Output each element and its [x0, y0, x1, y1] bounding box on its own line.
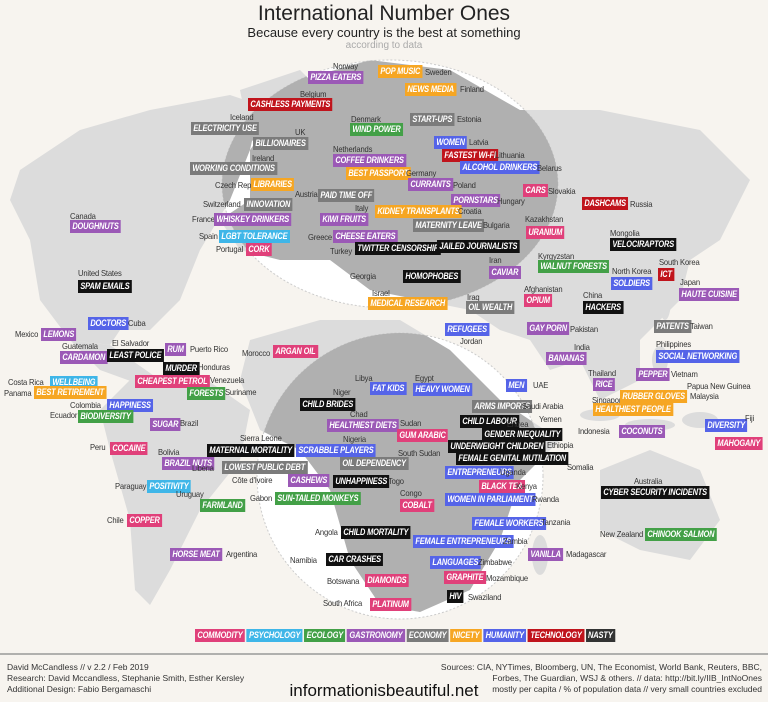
label: CARDAMON: [62, 352, 105, 363]
label: KIWI FRUITS: [322, 214, 366, 225]
label: ALCOHOL DRINKERS: [462, 162, 537, 173]
c: Pakistan: [570, 324, 598, 334]
label: ELECTRICITY USE: [193, 123, 257, 134]
label: DOCTORS: [90, 318, 126, 329]
subtitle: Because every country is the best at something: [247, 25, 521, 40]
label: [506, 379, 527, 392]
legend: ECOLOGY: [307, 630, 343, 641]
c: Georgia: [350, 271, 376, 281]
label: ICT: [660, 269, 672, 280]
c: Madagascar: [566, 549, 606, 559]
c: Mexico: [15, 329, 38, 339]
label: RICE: [595, 379, 612, 390]
label: KIDNEY TRANSPLANTS: [377, 206, 460, 217]
c: Philippines: [656, 339, 691, 349]
c: Bolivia: [158, 447, 179, 457]
label: COCONUTS: [621, 426, 662, 437]
label: UNDERWEIGHT CHILDREN: [450, 441, 543, 452]
credits: Additional Design: Fabio Bergamaschi: [7, 684, 151, 694]
legend: NICETY: [453, 630, 479, 641]
c: Australia: [634, 476, 662, 486]
label: FASTEST WI-FI: [444, 150, 496, 161]
label: CAVIAR: [491, 267, 518, 278]
c: Puerto Rico: [190, 344, 228, 354]
label: COBALT: [402, 500, 432, 511]
c: North Korea: [612, 266, 651, 276]
label: LEMONS: [43, 329, 74, 340]
c: Fiji: [745, 413, 754, 423]
website: informationisbeautiful.net: [289, 681, 478, 700]
label: CHILD LABOUR: [462, 416, 517, 427]
c: Togo: [388, 476, 404, 486]
c: Somalia: [567, 462, 593, 472]
label: MAHOGANY: [717, 438, 760, 449]
label: DASHCAMS: [584, 198, 626, 209]
c: Iceland: [230, 112, 253, 122]
label: [165, 343, 186, 356]
label: CHINOOK SALMON: [647, 529, 714, 540]
c: Côte d'Ivoire: [232, 475, 272, 485]
c: New Zealand: [600, 529, 643, 539]
c: Vietnam: [671, 369, 698, 379]
label: REFUGEES: [447, 324, 487, 335]
c: Swaziland: [468, 592, 501, 602]
label: LIBRARIES: [253, 179, 292, 190]
label: RUM: [167, 344, 184, 355]
c: Zambia: [503, 536, 527, 546]
c: Estonia: [457, 114, 481, 124]
c: Sudan: [400, 418, 421, 428]
label: CORK: [248, 244, 270, 255]
credits: [7, 662, 244, 694]
label: BANANAS: [548, 353, 584, 364]
label: WHISKEY DRINKERS: [216, 214, 289, 225]
credits: Research: David Mccandless, Stephanie Smith, Esther Kersley: [7, 673, 244, 683]
c: Saudi Arabia: [522, 401, 563, 411]
label: HAPPINESS: [109, 400, 151, 411]
label: INNOVATION: [246, 199, 290, 210]
c: Slovakia: [548, 186, 575, 196]
label: LOWEST PUBLIC DEBT: [224, 462, 305, 473]
c: Kenya: [516, 481, 537, 491]
c: South Africa: [323, 598, 362, 608]
label: WELLBEING: [52, 377, 95, 388]
label: HOMOPHOBES: [405, 271, 458, 282]
c: El Salvador: [112, 338, 149, 348]
label: FAT KIDS: [372, 383, 404, 394]
sources: Forbes, The Guardian, WSJ & others. // data: http://bit.ly/IIB_IntNoOnes: [492, 673, 762, 683]
c: Colombia: [70, 400, 101, 410]
c: United States: [78, 268, 122, 278]
legend: [195, 629, 616, 642]
label: DOUGHNUTS: [72, 221, 119, 232]
c: Congo: [400, 488, 422, 498]
c: Iraq: [467, 292, 479, 302]
c: Brazil: [180, 418, 198, 428]
c: Israel: [372, 288, 390, 298]
c: Switzerland: [203, 199, 241, 209]
c: Norway: [333, 61, 358, 71]
label: BEST RETIREMENT: [36, 387, 104, 398]
label: WOMEN IN PARLIAMENT: [447, 494, 533, 505]
c: Papua New Guinea: [687, 381, 750, 391]
c: Sierra Leone: [240, 433, 282, 443]
label: JAILED JOURNALISTS: [439, 241, 517, 252]
label: SUN-TAILED MONKEYS: [277, 493, 358, 504]
c: Jordan: [460, 336, 482, 346]
label: HACKERS: [585, 302, 621, 313]
legend: HUMANITY: [486, 630, 524, 641]
label: ENTREPRENEURS: [447, 467, 512, 478]
label: BRAZIL NUTS: [164, 458, 212, 469]
label: LGBT TOLERANCE: [221, 231, 287, 242]
label: OIL WEALTH: [468, 302, 512, 313]
label: VANILLA: [530, 549, 561, 560]
label: BIODIVERSITY: [80, 411, 131, 422]
label: [593, 378, 615, 391]
label: ARGAN OIL: [275, 346, 316, 357]
c: Costa Rica: [8, 377, 44, 387]
label: HAUTE CUISINE: [681, 289, 737, 300]
label: WIND POWER: [352, 124, 401, 135]
label: OIL DEPENDENCY: [342, 458, 406, 469]
c: China: [583, 290, 602, 300]
c: Greece: [308, 232, 332, 242]
legend: PSYCHOLOGY: [249, 630, 300, 641]
c: Russia: [630, 199, 652, 209]
label: MEN: [508, 380, 524, 391]
label: PORNSTARS: [453, 195, 498, 206]
label: ARMS IMPORTS: [474, 401, 530, 412]
c: South Korea: [659, 257, 700, 267]
label: HEALTHIEST DIETS: [329, 420, 397, 431]
label: LEAST POLICE: [109, 350, 161, 361]
c: Turkey: [330, 246, 352, 256]
label: SUGAR: [152, 419, 178, 430]
label: PIZZA EATERS: [310, 72, 361, 83]
c: UAE: [533, 380, 548, 390]
sources: [441, 662, 762, 694]
c: Paraguay: [115, 481, 146, 491]
c: Poland: [453, 180, 476, 190]
label: OPIUM: [526, 295, 550, 306]
label: CAR CRASHES: [328, 554, 381, 565]
label: START-UPS: [412, 114, 452, 125]
c: Cuba: [128, 318, 146, 328]
label: [246, 243, 272, 256]
label: WALNUT FORESTS: [540, 261, 607, 272]
legend: TECHNOLOGY: [530, 630, 582, 641]
label: [447, 590, 464, 603]
c: Namibia: [290, 555, 317, 565]
c: Argentina: [226, 549, 257, 559]
label: GRAPHITE: [446, 572, 483, 583]
c: Singapore: [592, 395, 625, 405]
label: CHILD MORTALITY: [343, 527, 408, 538]
label: CHILD BRIDES: [302, 399, 353, 410]
c: Eritrea: [507, 419, 528, 429]
c: Afghanistan: [524, 284, 562, 294]
c: Uruguay: [176, 489, 204, 499]
label: LANGUAGES: [432, 557, 478, 568]
c: Hungary: [497, 196, 525, 206]
label: HEALTHIEST PEOPLE: [595, 404, 671, 415]
label: CHEAPEST PETROL: [137, 376, 207, 387]
c: France: [192, 214, 215, 224]
label: GENDER INEQUALITY: [484, 429, 560, 440]
label: COCAINE: [112, 443, 145, 454]
label: HEAVY WOMEN: [415, 384, 470, 395]
label: FEMALE GENITAL MUTILATION: [458, 453, 566, 464]
label: MATERNITY LEAVE: [415, 220, 482, 231]
label: PAID TIME OFF: [320, 190, 372, 201]
c: Guatemala: [62, 341, 98, 351]
label: POP MUSIC: [380, 66, 420, 77]
label: DIVERSITY: [707, 420, 745, 431]
label: BEST PASSPORT: [348, 168, 408, 179]
label: TWITTER CENSORSHIP: [357, 243, 439, 254]
c: Spain: [199, 231, 218, 241]
label: MEDICAL RESEARCH: [370, 298, 445, 309]
legend: NASTY: [588, 630, 613, 641]
c: Mozambique: [486, 573, 528, 583]
label: FEMALE ENTREPRENEURS: [415, 536, 511, 547]
c: Thailand: [588, 368, 616, 378]
legend: COMMODITY: [197, 630, 243, 641]
label: CARS: [525, 185, 546, 196]
label: FORESTS: [189, 388, 223, 399]
c: Indonesia: [578, 426, 610, 436]
label: WORKING CONDITIONS: [192, 163, 275, 174]
label: COFFEE DRINKERS: [335, 155, 404, 166]
c: Canada: [70, 211, 96, 221]
c: Mongolia: [610, 228, 640, 238]
c: Finland: [460, 84, 484, 94]
c: Peru: [90, 442, 105, 452]
c: Yemen: [539, 414, 562, 424]
sources: mostly per capita / % of population data // very small countries excluded: [492, 684, 762, 694]
label: CASHEWS: [290, 475, 327, 486]
c: Rwanda: [532, 494, 559, 504]
c: Honduras: [198, 362, 230, 372]
c: Belarus: [537, 163, 562, 173]
c: Ecuador: [50, 410, 77, 420]
c: Japan: [680, 277, 700, 287]
label: NEWS MEDIA: [407, 84, 454, 95]
c: Libya: [355, 373, 372, 383]
title: International Number Ones: [258, 2, 510, 25]
c: Liberia: [192, 463, 214, 473]
c: Tanzania: [541, 517, 570, 527]
label: UNHAPPINESS: [335, 476, 387, 487]
c: South Sudan: [398, 448, 440, 458]
c: Panama: [4, 388, 31, 398]
label: HORSE MEAT: [172, 549, 220, 560]
label: FEMALE WORKERS: [474, 518, 543, 529]
c: Botswana: [327, 576, 359, 586]
label: PATENTS: [656, 321, 689, 332]
note: according to data: [346, 40, 422, 51]
c: Chad: [350, 409, 368, 419]
label: CYBER SECURITY INCIDENTS: [603, 487, 707, 498]
credits: David McCandless // v 2.2 / Feb 2019: [7, 662, 149, 672]
label: BILLIONAIRES: [255, 138, 306, 149]
c: Portugal: [216, 244, 243, 254]
label: GAY PORN: [529, 323, 567, 334]
c: Venezuela: [210, 375, 244, 385]
c: Netherlands: [333, 144, 372, 154]
c: Suriname: [225, 387, 256, 397]
sources: Sources: CIA, NYTimes, Bloomberg, UN, The Economist, World Bank, Reuters, BBC,: [441, 662, 762, 672]
c: Egypt: [415, 373, 434, 383]
c: Nigeria: [343, 434, 366, 444]
label: DIAMONDS: [367, 575, 406, 586]
c: Taiwan: [690, 321, 713, 331]
c: Bulgaria: [483, 220, 510, 230]
legend: GASTRONOMY: [349, 630, 402, 641]
c: Morocco: [242, 348, 270, 358]
label: FARMLAND: [202, 500, 243, 511]
label: MATERNAL MORTALITY: [209, 445, 292, 456]
label: CHEESE EATERS: [335, 231, 395, 242]
c: Italy: [355, 203, 368, 213]
label: SOCIAL NETWORKING: [658, 351, 737, 362]
c: Belgium: [300, 89, 326, 99]
c: Niger: [333, 387, 350, 397]
legend: ECONOMY: [409, 630, 446, 641]
label: RUBBER GLOVES: [622, 391, 685, 402]
c: Zimbabwe: [478, 557, 512, 567]
label: SCRABBLE PLAYERS: [298, 445, 374, 456]
c: Sweden: [425, 67, 452, 77]
label: POSITIVITY: [149, 481, 189, 492]
c: Chile: [107, 515, 124, 525]
c: Kazakhstan: [525, 214, 563, 224]
label: CASHLESS PAYMENTS: [250, 99, 330, 110]
c: UK: [295, 127, 305, 137]
label: SOLDIERS: [613, 278, 650, 289]
c: Uganda: [500, 467, 526, 477]
c: Angola: [315, 527, 338, 537]
c: Croatia: [458, 206, 481, 216]
label: COPPER: [129, 515, 160, 526]
label: HIV: [449, 591, 461, 602]
label: VELOCIRAPTORS: [612, 239, 674, 250]
label: [523, 184, 548, 197]
c: Iran: [489, 255, 501, 265]
c: Ethiopia: [547, 440, 573, 450]
label: URANIUM: [528, 227, 562, 238]
label: [658, 268, 674, 281]
label: CURRANTS: [410, 179, 451, 190]
c: Lithuania: [495, 150, 524, 160]
c: Gabon: [250, 493, 272, 503]
c: Malaysia: [690, 391, 719, 401]
label: SPAM EMAILS: [80, 281, 130, 292]
c: Ireland: [252, 153, 274, 163]
c: India: [574, 342, 590, 352]
c: Denmark: [351, 114, 381, 124]
c: Austria: [295, 189, 318, 199]
label: PLATINUM: [372, 599, 409, 610]
c: Germany: [406, 168, 436, 178]
label: PEPPER: [638, 369, 667, 380]
label: MURDER: [165, 363, 197, 374]
label: WOMEN: [436, 137, 465, 148]
label: GUM ARABIC: [399, 430, 446, 441]
c: Czech Rep.: [215, 180, 253, 190]
label: BLACK TEA: [481, 481, 523, 492]
c: Latvia: [469, 137, 488, 147]
c: Kyrgyzstan: [538, 251, 574, 261]
